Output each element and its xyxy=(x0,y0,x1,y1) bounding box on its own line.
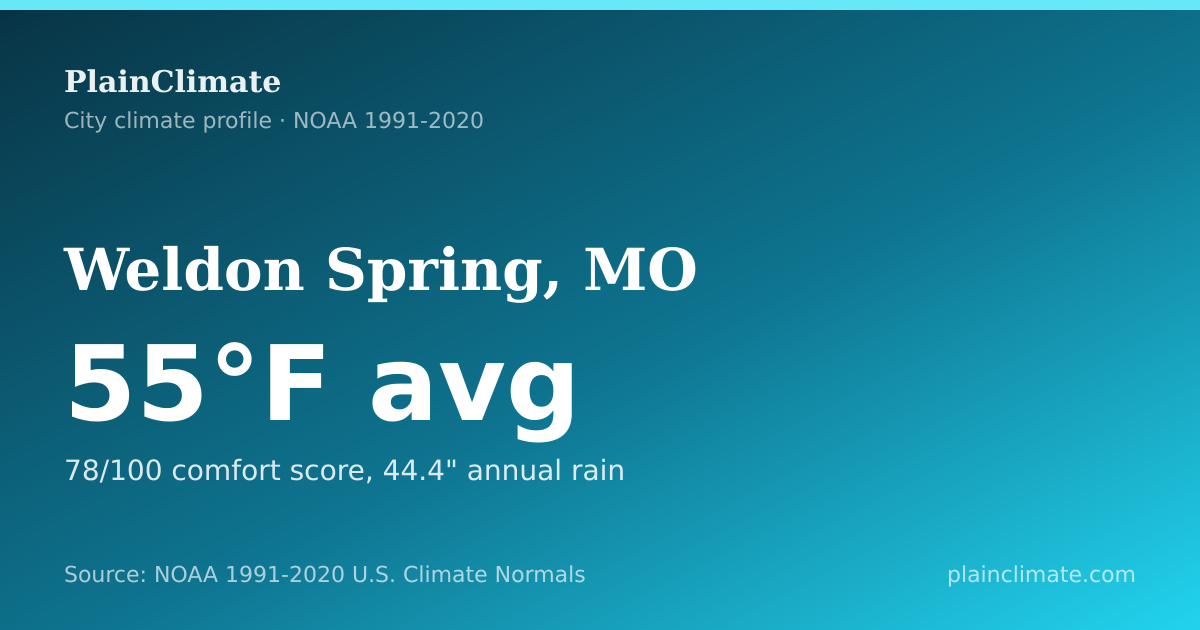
comfort and rain summary: 78/100 comfort score, 44.4" annual rain xyxy=(64,454,625,487)
temperature headline: 55°F avg xyxy=(64,323,580,445)
source note: Source: NOAA 1991-2020 U.S. Climate Normals xyxy=(64,563,586,588)
city heading: Weldon Spring, MO xyxy=(64,236,698,304)
brand name: PlainClimate xyxy=(64,65,281,100)
top accent bar xyxy=(0,0,1200,10)
brand subtitle: City climate profile · NOAA 1991-2020 xyxy=(64,109,484,134)
site url: plainclimate.com xyxy=(947,563,1136,588)
